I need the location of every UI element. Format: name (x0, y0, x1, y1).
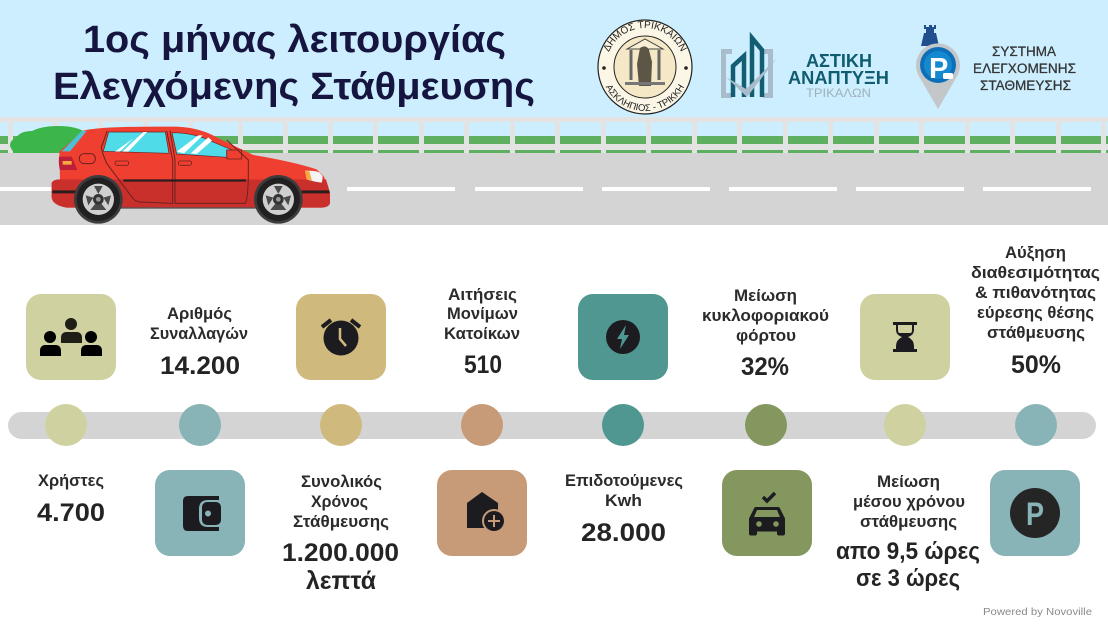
road scene (0, 117, 1108, 225)
icon tile: energy bolt (578, 294, 668, 380)
stat: transactions: Αριθμός (167, 304, 232, 323)
stat: availability increase: 50% (1011, 351, 1061, 379)
stat: traffic load reduction: κυκλοφοριακού (702, 306, 829, 325)
stat: resident permits: Κατοίκων (444, 324, 520, 343)
logo: urban development Trikala: ΤΡΙΚΑΛΩΝ (806, 86, 871, 100)
stat: average parking time reduction: μέσου χρόνου (853, 492, 965, 511)
stat: transactions: Συναλλαγών (150, 324, 248, 343)
logo: municipality seal: ΔΗΜΟΣ ΤΡΙΚΚΑΙΩΝ (604, 21, 687, 52)
icon tile: wallet (155, 470, 245, 556)
title: 1ος μήνας λειτουργίας (83, 19, 506, 61)
stat: subsidised kWh: Kwh (605, 491, 642, 510)
stat: availability increase: στάθμευσης (987, 323, 1085, 342)
stat: average parking time reduction: Μείωση (877, 472, 940, 491)
footer credit: Powered by Novoville (983, 606, 1092, 618)
logo: controlled parking system: ΣΥΣΤΗΜΑ (992, 44, 1056, 59)
icon tile: car with check (722, 470, 812, 556)
rear wheel (74, 175, 123, 224)
title (53, 19, 535, 108)
front wheel (254, 175, 303, 224)
icon tile: alarm clock (296, 294, 386, 380)
icon tile: parking (990, 470, 1080, 556)
stat: traffic load reduction: 32% (741, 353, 789, 381)
stat: average parking time reduction: στάθμευσης (860, 512, 957, 531)
stat: traffic load reduction (702, 286, 829, 381)
stat: users: 4.700 (37, 499, 105, 527)
stat: users: Χρήστες (38, 471, 104, 490)
logo: municipality seal (597, 19, 693, 115)
stat: total parking time: Στάθμευσης (293, 512, 389, 531)
stat: total parking time: λεπτά (306, 567, 377, 595)
stat: transactions (150, 304, 248, 380)
logo: municipality seal: ΑΣΚΛΗΠΙΟΣ - ΤΡΙΚΚΗ (606, 84, 684, 112)
stat: resident permits: Αιτήσεις (448, 285, 517, 304)
header band (0, 0, 1108, 118)
stat: total parking time: 1.200.000 (282, 539, 399, 567)
bush (10, 126, 85, 153)
stat: subsidised kWh: 28.000 (581, 519, 666, 547)
stat: average parking time reduction: απο 9,5 ώρες (836, 538, 980, 565)
stat: availability increase: εύρεσης θέσης (977, 303, 1094, 322)
icon tile: parking: P (1026, 496, 1044, 532)
logo: controlled parking system: P (929, 53, 948, 85)
stat: resident permits: Μονίμων (447, 304, 518, 323)
stat: traffic load reduction: φόρτου (736, 326, 796, 345)
stat: average parking time reduction (836, 472, 980, 592)
icon tile: hourglass (860, 294, 950, 380)
icon tile: users (26, 294, 116, 380)
title: Ελεγχόμενης Στάθμευσης (53, 66, 535, 108)
stat: total parking time (282, 472, 399, 595)
stat: traffic load reduction: Μείωση (734, 286, 797, 305)
stat: subsidised kWh: Επιδοτούμενες (565, 471, 683, 490)
icon tile: add home (437, 470, 527, 556)
lane markings (0, 187, 1091, 191)
stat: users (37, 471, 105, 527)
logo: urban development Trikala (724, 38, 889, 100)
logo: controlled parking system (916, 25, 1076, 109)
stat: transactions: 14.200 (160, 352, 240, 380)
logo: urban development Trikala: ΑΝΑΠΤΥΞΗ (788, 68, 889, 88)
stat: subsidised kWh (565, 471, 683, 547)
logo: urban development Trikala: ΑΣΤΙΚΗ (806, 51, 872, 71)
logo: controlled parking system: ΣΤΑΘΜΕΥΣΗΣ (980, 78, 1071, 93)
stat: availability increase (971, 243, 1100, 379)
stat: resident permits: 510 (464, 351, 502, 379)
stat: total parking time: Συνολικός (301, 472, 382, 491)
stat: total parking time: Χρόνος (311, 492, 368, 511)
stat: availability increase: διαθεσιμότητας (971, 263, 1100, 282)
logo: controlled parking system: ΕΛΕΓΧΟΜΕΝΗΣ (973, 61, 1076, 76)
stat: availability increase: Αύξηση (1005, 243, 1066, 262)
stat: average parking time reduction: σε 3 ώρες (856, 565, 960, 592)
red car (52, 127, 330, 224)
timeline track with dots (8, 404, 1096, 446)
stat: resident permits (444, 285, 520, 379)
stat: availability increase: & πιθανότητας (975, 283, 1096, 302)
